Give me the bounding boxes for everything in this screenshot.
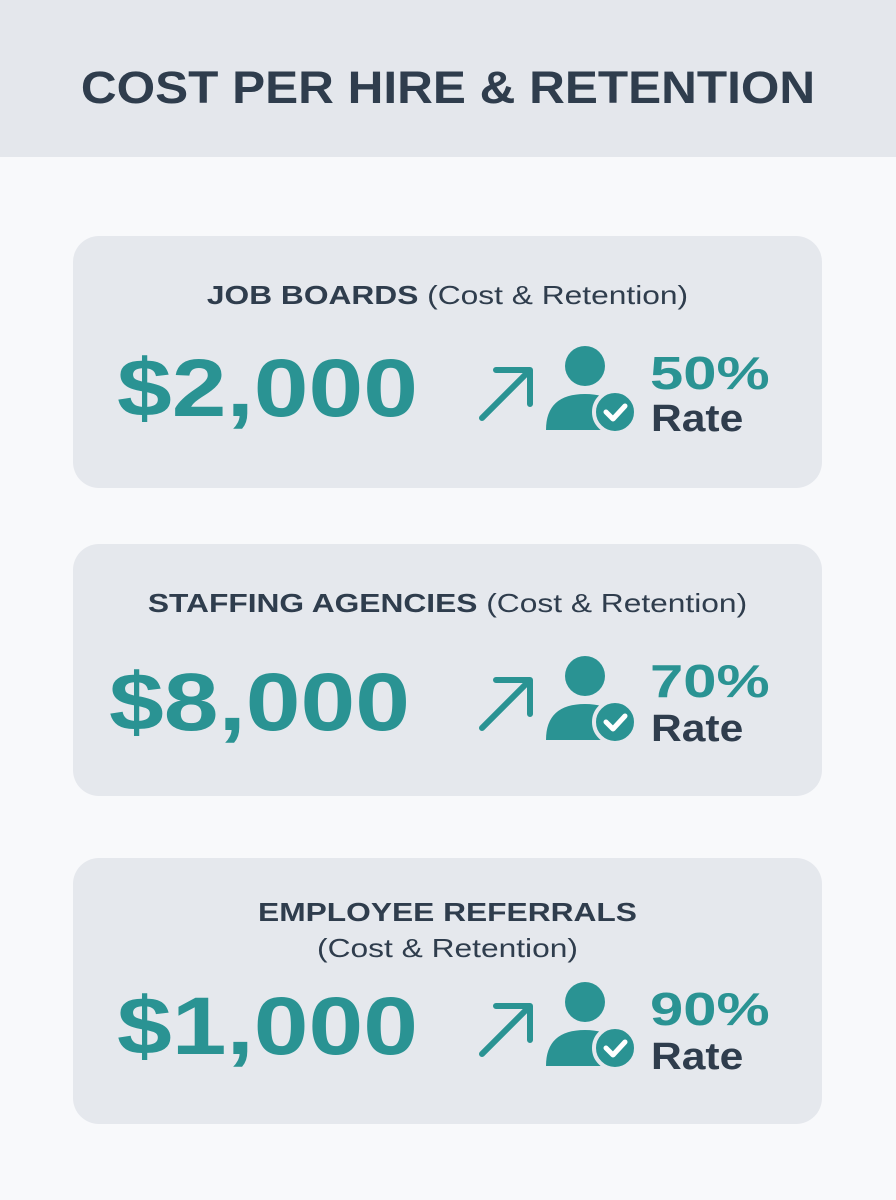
title: COST PER HIRE & RETENTION [81, 62, 815, 113]
cost value: $8,000 [109, 657, 410, 748]
panel: job boards [73, 236, 822, 488]
panel: job boards: Rate [651, 398, 743, 440]
icon: arrow and person [479, 346, 634, 431]
panel: staffing agencies: Rate [651, 708, 743, 750]
header band [0, 0, 896, 157]
icon: arrow and person [479, 656, 634, 741]
panel: employee referrals [73, 858, 822, 1124]
card title: EMPLOYEE REFERRALS [258, 897, 637, 927]
cost value: $1,000 [117, 981, 418, 1072]
panel: employee referrals: Rate [651, 1036, 743, 1078]
retention rate: 50% [650, 347, 770, 399]
panel: staffing agencies [73, 544, 822, 796]
retention rate: 90% [650, 983, 770, 1035]
card title [258, 897, 637, 963]
cost value: $2,000 [117, 343, 418, 434]
card title: STAFFING AGENCIES (Cost & Retention) [148, 588, 747, 618]
icon: arrow and person [479, 982, 634, 1067]
card title: (Cost & Retention) [317, 933, 578, 963]
retention rate: 70% [650, 655, 770, 707]
card title: JOB BOARDS (Cost & Retention) [207, 280, 688, 310]
